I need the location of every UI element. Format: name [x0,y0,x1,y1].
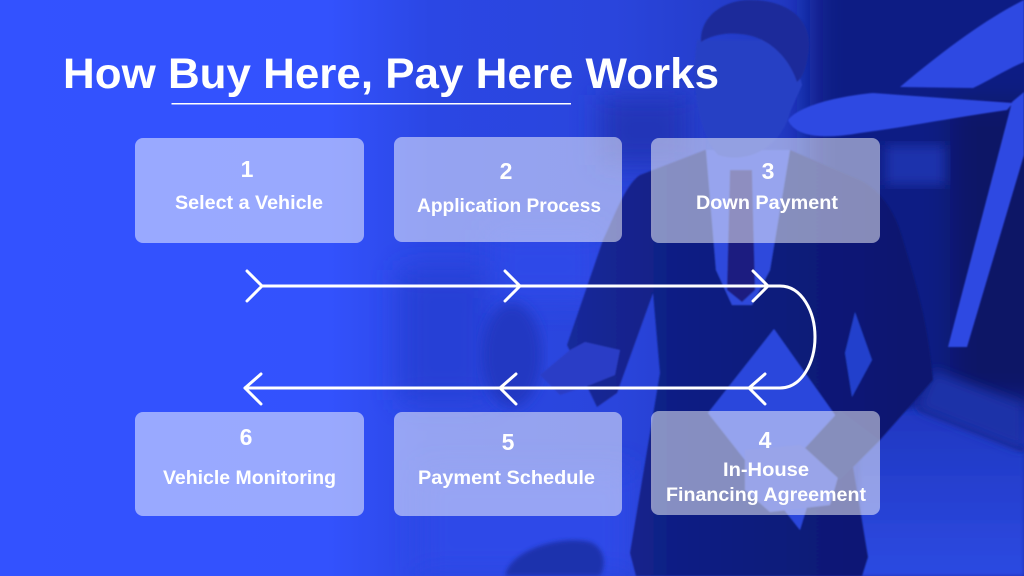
man: suit [567,150,933,576]
man: hair [701,0,809,82]
step 6 card: 6 [240,424,252,450]
step 5 card [394,412,622,516]
showroom floor [860,408,1024,576]
man: hand holding key [540,342,620,395]
man: clipboard [708,329,835,530]
car lights [885,145,945,185]
man: shirt [706,150,790,305]
step 4 card: 4 [759,427,772,453]
step 3 card: Down Payment [696,193,839,214]
step 2 card: 2 [500,158,512,184]
step 2 card: Application Process [417,196,601,217]
step 4 card [651,411,880,515]
chevron: end of bottom line [245,374,261,404]
chevron: start of top line [247,271,262,301]
man: hand on clipboard [745,445,840,512]
man: face [695,40,802,158]
chevron: middle of top line [505,271,520,301]
dark blurred figure in mid-ground [482,303,542,407]
step 6 card [135,412,364,516]
step 3 card [651,138,880,243]
step 5 card: 5 [502,429,515,455]
chevron: start of bottom line [749,374,765,404]
chevron: end of top line [753,271,768,301]
title: How Buy Here, Pay Here Works [63,50,719,98]
man: cuff on clipboard hand [805,410,880,480]
step 4 card: Financing Agreement [666,485,867,506]
other person's shoulder [505,540,604,576]
chevron: middle of bottom line [500,374,516,404]
title underline [172,103,571,104]
car body [788,0,1024,347]
step 3 card: 3 [762,158,774,184]
step 6 card: Vehicle Monitoring [163,468,336,489]
step 1 card: 1 [241,156,254,182]
step 1 card: Select a Vehicle [175,193,323,214]
man: gap between arm and body [845,312,872,397]
man [540,0,933,576]
step 5 card: Payment Schedule [418,468,595,489]
step 1 card [135,138,364,243]
step 4 card: In-House [723,460,809,481]
man: tie [727,170,755,302]
flow arrow [245,271,815,404]
blurred showroom [400,0,1024,576]
step 2 card [394,137,622,242]
